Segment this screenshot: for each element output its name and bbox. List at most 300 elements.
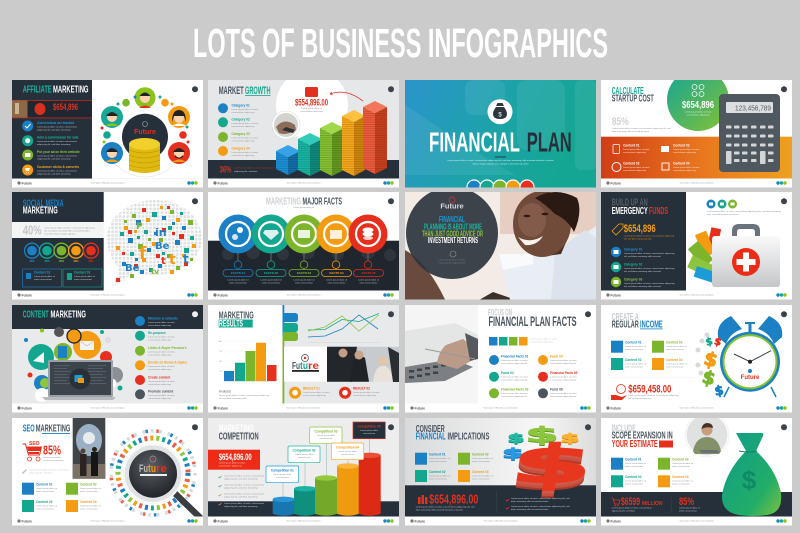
- SEO cart and 85%: 85%: [43, 442, 61, 457]
- cover title: PLAN: [527, 127, 572, 158]
- slide title: SOCIAL MEDIA: [23, 197, 64, 209]
- competition callouts: Lorem ipsum dolor: [273, 473, 292, 476]
- content squares: amet consectetuer: [666, 348, 684, 351]
- competition callouts: Competition 05: [357, 424, 381, 428]
- slide: marketing results: [208, 305, 399, 412]
- slide title: FOCUS ON: [488, 308, 512, 318]
- category rows: consectetuer adipiscing: [232, 111, 255, 114]
- connectors: [283, 439, 370, 499]
- slide title: [612, 197, 668, 217]
- red price box: $654,896.00: [219, 452, 252, 463]
- check items: diam nonummy nibh euismod tincidunt: [511, 508, 549, 511]
- quote text: [422, 215, 483, 245]
- content squares: amet consectetuer: [80, 490, 98, 493]
- red price box: consectetuer adipiscing: [219, 464, 242, 468]
- grey note: Lorem ipsum dolor sit amet, consectetuer: [29, 468, 69, 472]
- right list: Lorem ipsum dolor sit amet,: [148, 394, 175, 397]
- white band with logo and photo: [284, 347, 399, 382]
- speech bubble word cloud: Be: [155, 241, 170, 252]
- footer: [208, 290, 399, 300]
- photo strip with price: [12, 100, 92, 118]
- money bag badge: [488, 99, 512, 124]
- footer: Future: [610, 406, 621, 410]
- ring labels: 48%: [59, 260, 65, 263]
- page badge: [388, 311, 394, 317]
- band contents: Content 01: [623, 144, 640, 148]
- contact labels: amet consectetuer: [34, 278, 52, 281]
- money bag: [722, 433, 781, 516]
- content squares: Lorem ipsum dolor sit: [36, 487, 57, 490]
- cover title: FINANCIAL: [429, 127, 520, 158]
- slide title: [22, 86, 88, 92]
- footer: Your topic of Business presentation: [90, 520, 125, 522]
- content squares: amet consectetuer: [666, 366, 684, 368]
- social rings: [24, 243, 98, 258]
- slide title: EMERGENCY: [612, 205, 648, 217]
- contact labels: Lorem ipsum dolor sit: [34, 275, 55, 278]
- list rows: adipiscing elit, sed diam nonummy: [37, 128, 71, 132]
- checklist: [218, 474, 264, 508]
- big red dollar: $: [506, 441, 596, 502]
- slide title: CREATE A: [612, 311, 639, 323]
- category rows: Lorem ipsum dolor sit amet, consectetuer adipiscing: [624, 282, 675, 285]
- price: diam nonummy nibh euismod tincidunt ut laoreet: [416, 508, 463, 512]
- check items: [496, 491, 570, 513]
- page badge: [192, 311, 198, 317]
- page badge: [781, 311, 787, 317]
- photo strip with price: $654,896: [53, 102, 78, 112]
- fact descriptions: amet consectetuer: [328, 282, 346, 284]
- gradient circle with price: consectetuer adipiscing: [687, 114, 710, 116]
- footer: Future: [218, 406, 228, 410]
- fact labels: FACTS 03: [297, 271, 311, 275]
- cover subtitle: Lorem ipsum dolor sit amet, consectetuer adipiscing elit, sed diam nonummy nibh euismod tincidunt ut laoreet: [447, 159, 554, 162]
- fact rows: Financial Facts 03: [501, 388, 529, 392]
- right list: Lorem ipsum dolor sit amet,: [148, 365, 175, 368]
- colored dollar signs: $: [714, 383, 725, 400]
- contact labels: amet consectetuer: [74, 278, 92, 281]
- content squares: Content 02: [429, 470, 446, 474]
- content squares: Lorem ipsum dolor sit: [666, 362, 687, 366]
- 40% stat: Lorem ipsum dolor sit amet, consectetuer adipiscing: [44, 226, 95, 230]
- result items: consectetuer adipiscing: [353, 394, 377, 397]
- slide: photo with quote: [405, 187, 596, 300]
- content squares: Content 01: [625, 458, 642, 462]
- slide title: INCOME: [640, 318, 663, 330]
- competition callouts: consectetuer: [341, 453, 354, 456]
- four icon squares: [489, 337, 557, 346]
- bottom dark band: [405, 485, 596, 516]
- competition callouts: Competition 04: [336, 446, 359, 450]
- footer: Future: [218, 519, 228, 523]
- magnifying glass: Fu: [139, 463, 148, 475]
- speech bubble word cloud: t: [169, 252, 176, 268]
- content squares: Content 03: [666, 340, 683, 344]
- speech bubble word cloud: tv: [151, 268, 159, 276]
- slide title: CONSIDER: [416, 423, 445, 435]
- footer: Your topic of Business presentation: [90, 406, 125, 410]
- page badge: [192, 424, 198, 430]
- page badge: [388, 198, 394, 204]
- colored dollar signs: $: [702, 348, 720, 372]
- band contents: Lorem ipsum dolor sit amet: [673, 166, 700, 169]
- check items: Lorem ipsum dolor sit amet, consectetuer adipiscing elit, sed: [511, 505, 570, 508]
- footer: [12, 516, 203, 526]
- contact labels: Contact 01: [74, 270, 91, 274]
- content squares: Lorem ipsum dolor sit: [625, 362, 646, 366]
- fact descriptions: Lorem ipsum dolor sit: [228, 278, 249, 282]
- band contents: [612, 144, 700, 172]
- fact rows: consectetuer adipiscing elit: [501, 362, 528, 365]
- businessman photo: [405, 191, 596, 300]
- competition callouts: Lorem ipsum dolor: [317, 434, 335, 437]
- footer: Future: [22, 406, 32, 410]
- cover subtitle: dolore magna aliquam erat volutpat ut wisi enim ad minim: [473, 162, 529, 166]
- footer: Your topic of Business presentation: [286, 520, 321, 522]
- grey note: [22, 468, 69, 474]
- content squares: [611, 340, 693, 377]
- band contents: Lorem ipsum dolor sit amet: [623, 148, 650, 151]
- category rows: Lorem ipsum dolor sit amet, consectetuer adipiscing: [624, 252, 675, 255]
- price with hand icon: Lorem ipsum dolor sit amet, consectetuer adipiscing: [628, 394, 680, 397]
- money bag badge: $: [498, 112, 502, 118]
- fact labels: FACTS 04: [329, 271, 344, 275]
- right list: consectetuer adipiscing: [148, 354, 172, 356]
- ring of colored icons: [111, 431, 195, 515]
- footer: Future: [610, 181, 621, 185]
- content squares: Lorem ipsum dolor sit: [429, 457, 450, 460]
- attribution: [438, 251, 466, 264]
- small 3D dollar signs: $: [525, 424, 559, 448]
- page badge: [781, 424, 787, 430]
- footer: Future: [414, 406, 425, 410]
- content squares: Content 04: [80, 500, 97, 504]
- small 3D dollar signs: $: [560, 433, 580, 446]
- quote text: INVESTMENT RETURNS: [428, 236, 478, 245]
- price: Lorem ipsum dolor sit amet, consectetuer adipiscing: [624, 234, 675, 238]
- speech bubble word cloud: in: [155, 226, 167, 239]
- competition callouts: consectetuer: [320, 437, 333, 440]
- category rows: Category 03: [624, 278, 642, 282]
- slide: financial plan facts: [405, 305, 596, 412]
- footer: Your topic of Business presentation: [286, 406, 321, 410]
- page badge: [192, 198, 198, 204]
- right list: Re-purpose: [148, 331, 166, 335]
- fact rows: Lorem ipsum dolor sit amet,: [550, 376, 577, 378]
- list rows: [22, 120, 80, 176]
- page badge: [781, 86, 787, 92]
- gradient circle with price: $654,896: [682, 100, 714, 111]
- page badge: [192, 86, 198, 92]
- colored dollar signs: $: [713, 336, 722, 349]
- fact descriptions: amet consectetuer: [295, 282, 313, 284]
- slide: scope expansion: [601, 413, 792, 526]
- grey note: adipiscing elit, sed diam: [29, 472, 52, 474]
- list rows: Lorem ipsum dolor sit amet, consectetuer: [37, 126, 77, 128]
- slide: social media marketing: [12, 192, 203, 300]
- stats in band: MILLION: [642, 501, 663, 507]
- fact descriptions: Lorem ipsum dolor sit: [261, 278, 282, 282]
- footer: [208, 404, 399, 412]
- small 3D dollar signs: $: [502, 445, 524, 461]
- bar chart: 75: [220, 351, 223, 353]
- fact descriptions: Lorem ipsum dolor sit: [358, 278, 379, 282]
- slide: affiliate marketing: [12, 80, 203, 188]
- content squares: Content 03: [672, 458, 689, 462]
- 85% stat: [612, 118, 670, 132]
- band contents: consectetuer adipiscing: [673, 151, 697, 154]
- line chart: [308, 314, 381, 342]
- gradient circle with price: [667, 80, 728, 131]
- checklist: Lorem ipsum dolor sit amet, consectetuer: [224, 474, 264, 478]
- footer: Your topic of Business presentation: [483, 406, 518, 410]
- slide title: [219, 309, 254, 330]
- footer: Future: [22, 181, 32, 185]
- faint coin stacks background: [405, 80, 597, 175]
- 40% stat: ut laoreet dolore magna aliquam: [44, 232, 76, 236]
- competition callouts: Lorem ipsum dolor: [338, 450, 357, 453]
- avatars and coins diagram: Future: [134, 129, 156, 136]
- white band with logo and photo: re: [308, 360, 319, 372]
- gradient circle with price: Lorem ipsum dolor sit amet: [685, 110, 712, 114]
- price with hand icon: $659,458.00: [628, 384, 671, 396]
- footer: [12, 178, 203, 185]
- category rows: Lorem ipsum dolor sit amet,: [232, 151, 259, 154]
- result items: [289, 386, 380, 399]
- dark overlay circle: [406, 187, 498, 279]
- magnifying glass: tu: [148, 463, 156, 475]
- white band with logo and photo: tu: [300, 360, 308, 372]
- content squares: amet consectetuer: [625, 366, 643, 368]
- content squares: amet consectetuer: [625, 482, 643, 486]
- footer: [601, 516, 792, 526]
- right list: Lorem ipsum dolor sit amet,: [148, 321, 175, 324]
- content squares: Lorem ipsum dolor sit: [472, 474, 493, 478]
- slide title: MARKET: [219, 85, 244, 97]
- checklist: adipiscing elit, sed diam nonummy: [224, 478, 258, 480]
- content squares: amet consectetuer: [36, 490, 54, 493]
- fact rows: consectetuer adipiscing elit: [550, 362, 577, 365]
- photo circle: [272, 111, 300, 139]
- SEO cart and 85%: [22, 441, 64, 462]
- speech bubble word cloud: Be: [125, 263, 140, 274]
- slide title: SEO: [23, 422, 35, 434]
- 40% stat: [23, 223, 95, 238]
- alarm clock: [718, 316, 782, 397]
- dark side panel: [601, 192, 686, 290]
- list rows: Customer clicks & converts: [37, 165, 79, 169]
- right list: consectetuer adipiscing: [148, 324, 172, 327]
- bar chart: [218, 341, 276, 381]
- speech bubble word cloud: f: [139, 244, 147, 264]
- fact rows: Financial Facts 01: [501, 354, 529, 358]
- slide title: MARKETING: [266, 196, 301, 208]
- dark header panel: [12, 192, 104, 222]
- attribution: Lorem ipsum dolor sit amet,: [438, 258, 466, 262]
- slide title: [23, 422, 70, 434]
- price callout: Lorem ipsum dolor sit: [301, 107, 322, 110]
- footer: [606, 181, 787, 185]
- footer: Future: [414, 519, 425, 523]
- slide title: FUNDS: [649, 205, 668, 217]
- ring labels: 40%: [29, 260, 35, 263]
- avatars and coins diagram: [100, 87, 190, 177]
- slide title: REGULAR: [612, 318, 639, 330]
- right list: Promote content: [148, 390, 174, 394]
- fact rows: Financial Facts 05: [550, 371, 578, 375]
- small 3D dollar signs: [502, 423, 580, 462]
- category rows: Lorem ipsum dolor sit amet,: [232, 122, 259, 125]
- right list: Measure & evaluate: [148, 316, 178, 320]
- slide title: STARTUP COST: [612, 93, 654, 105]
- contact labels: Lorem ipsum dolor sit: [74, 275, 95, 278]
- slide title: RESULTS: [219, 319, 243, 330]
- page badge: [388, 86, 394, 92]
- SEO cart and 85%: sit amet consectetuer: [43, 459, 64, 462]
- slide title: MAJOR FACTS: [302, 196, 342, 208]
- slide title: [219, 422, 259, 443]
- content squares: Content 01: [429, 452, 446, 456]
- check items: Lorem ipsum dolor sit amet, consectetuer adipiscing elit, sed: [511, 497, 570, 500]
- competition callouts: Competition 03: [314, 430, 338, 434]
- slide title: YOUR ESTIMATE: [612, 438, 658, 450]
- slide title: AFFILIATE: [23, 84, 52, 96]
- slide title: BUILD UP AN: [612, 197, 648, 209]
- band contents: Lorem ipsum dolor sit amet: [623, 166, 650, 169]
- list rows: adipiscing elit, sed diam nonummy: [37, 172, 71, 176]
- contact boxes: [23, 269, 102, 287]
- fact rows: consectetuer adipiscing elit: [501, 378, 528, 382]
- content squares: Lorem ipsum dolor sit: [36, 504, 57, 508]
- content squares: amet consectetuer: [625, 348, 643, 351]
- category rows: consectetuer adipiscing: [232, 140, 255, 142]
- price callout: consectetuer adipiscing: [300, 110, 324, 113]
- page badge: [585, 311, 591, 317]
- calculator: 123,456,789: [735, 106, 771, 112]
- list rows: Lorem ipsum dolor sit amet, consectetuer: [37, 140, 77, 143]
- white circle behind price: [276, 80, 348, 138]
- cover title: [430, 132, 571, 152]
- footer: [405, 516, 596, 526]
- result items: consectetuer adipiscing: [303, 394, 327, 397]
- photo: two men facing a tunnel: [73, 418, 105, 479]
- footer: Your topic of Business presentation: [483, 520, 518, 522]
- content squares: Lorem ipsum dolor sit: [472, 457, 493, 460]
- quote text: THAN JUST GOOD ADVICE OR: [422, 230, 483, 238]
- red price box: [208, 450, 260, 470]
- right list: Lorem ipsum dolor sit amet,: [148, 336, 175, 338]
- list rows: Lorem ipsum dolor sit amet, consectetuer: [37, 170, 77, 172]
- 36% stat: Lorem ipsum dolor sit amet, consectetuer: [234, 166, 274, 170]
- list rows: Lorem ipsum dolor sit amet, consectetuer: [37, 154, 77, 158]
- content squares: amet consectetuer: [472, 460, 490, 463]
- footer: [12, 404, 203, 412]
- result items: Lorem ipsum dolor sit amet,: [303, 391, 330, 394]
- dark crowd band: [208, 241, 399, 290]
- category rows: Category 02: [232, 118, 250, 122]
- slide title: Lorem ipsum dolor sit: [293, 206, 314, 209]
- content squares: amet consectetuer: [429, 460, 447, 463]
- content squares: [611, 458, 693, 487]
- slide: financial implications: [405, 418, 597, 526]
- fact descriptions: [228, 278, 379, 284]
- right list: consectetuer adipiscing: [148, 368, 172, 371]
- category rows: Category 01: [232, 104, 250, 108]
- stats in band: [612, 496, 700, 513]
- slide title: MARKETING: [23, 205, 58, 217]
- fact rows: Facts 04: [550, 354, 563, 358]
- category rows: [218, 103, 259, 157]
- quote text: PLANNING IS ABOUT MORE: [424, 222, 482, 232]
- slide title: [612, 311, 663, 330]
- competition callouts: Competition 01: [271, 468, 294, 472]
- list rows: Gets a commission for sale: [37, 136, 79, 140]
- right list: Lorem ipsum dolor sit amet,: [148, 380, 175, 383]
- SEO cart and 85%: Lorem ipsum dolor: [43, 456, 61, 459]
- bar chart: 100: [218, 341, 223, 343]
- bar chart: 25: [220, 371, 223, 373]
- dark header band: [12, 305, 203, 329]
- dark side panel: [12, 80, 92, 178]
- ring labels: 39%: [73, 260, 79, 263]
- footer: Future: [610, 293, 621, 297]
- footer: Future: [218, 181, 228, 185]
- analysis text: [219, 390, 270, 400]
- 40% stat: elit, sed diam nonummy nibh euismod tincidunt: [44, 230, 90, 232]
- attribution: consectetuer adipiscing elit: [439, 262, 466, 264]
- content squares: Lorem ipsum dolor sit: [666, 345, 687, 348]
- competition callouts: Competition 02: [292, 448, 316, 452]
- price: [612, 223, 675, 240]
- dark lower panel: [12, 238, 104, 290]
- colored dollar signs: [696, 332, 725, 400]
- fact rows: Lorem ipsum dolor sit amet,: [501, 392, 528, 395]
- right list: consectetuer adipiscing: [148, 383, 172, 386]
- price: Lorem ipsum dolor sit amet, consectetuer adipiscing elit, sed: [416, 506, 475, 508]
- slide: content marketing: [12, 305, 203, 412]
- 36% stat: [220, 166, 274, 172]
- right list: Listen & Buyer Persona's: [148, 346, 187, 350]
- category rows: Category 04: [232, 146, 250, 150]
- list rows: adipiscing elit, sed diam nonummy: [37, 143, 71, 146]
- band contents: Content 04: [673, 162, 690, 166]
- content squares: Content 03: [472, 452, 489, 456]
- big red dollar: $: [507, 434, 597, 495]
- content squares: Lorem ipsum dolor sit: [625, 462, 646, 465]
- list rows: Put your ad on their website: [37, 150, 80, 154]
- footer: [208, 178, 399, 188]
- check items: diam nonummy nibh euismod tincidunt: [511, 500, 549, 503]
- category rows: Lorem ipsum dolor sit amet,: [232, 108, 259, 111]
- competition callouts: [266, 422, 385, 483]
- list rows: adipiscing elit, sed diam nonummy: [37, 158, 71, 160]
- content squares: Lorem ipsum dolor sit: [625, 480, 646, 482]
- band contents: consectetuer adipiscing: [623, 169, 647, 172]
- footer: Your topic of Business presentation: [90, 182, 125, 184]
- slide title: COMPETITION: [219, 431, 259, 443]
- light strip: [12, 222, 104, 238]
- fact rows: Lorem ipsum dolor sit amet,: [550, 359, 577, 362]
- alarm clock: Future: [741, 375, 760, 381]
- footer: Your topic of Business presentation: [679, 406, 714, 410]
- footer: Your topic of Business presentation: [286, 182, 321, 184]
- slide title: [488, 308, 576, 329]
- page badge: [585, 424, 591, 430]
- result items: RESULT 01: [303, 386, 320, 390]
- band contents: Content 02: [623, 162, 640, 166]
- 36% stat: adipiscing elit, sed diam: [234, 170, 257, 173]
- 85% stat: diam nonummy nibh euismod tincidunt: [612, 130, 649, 133]
